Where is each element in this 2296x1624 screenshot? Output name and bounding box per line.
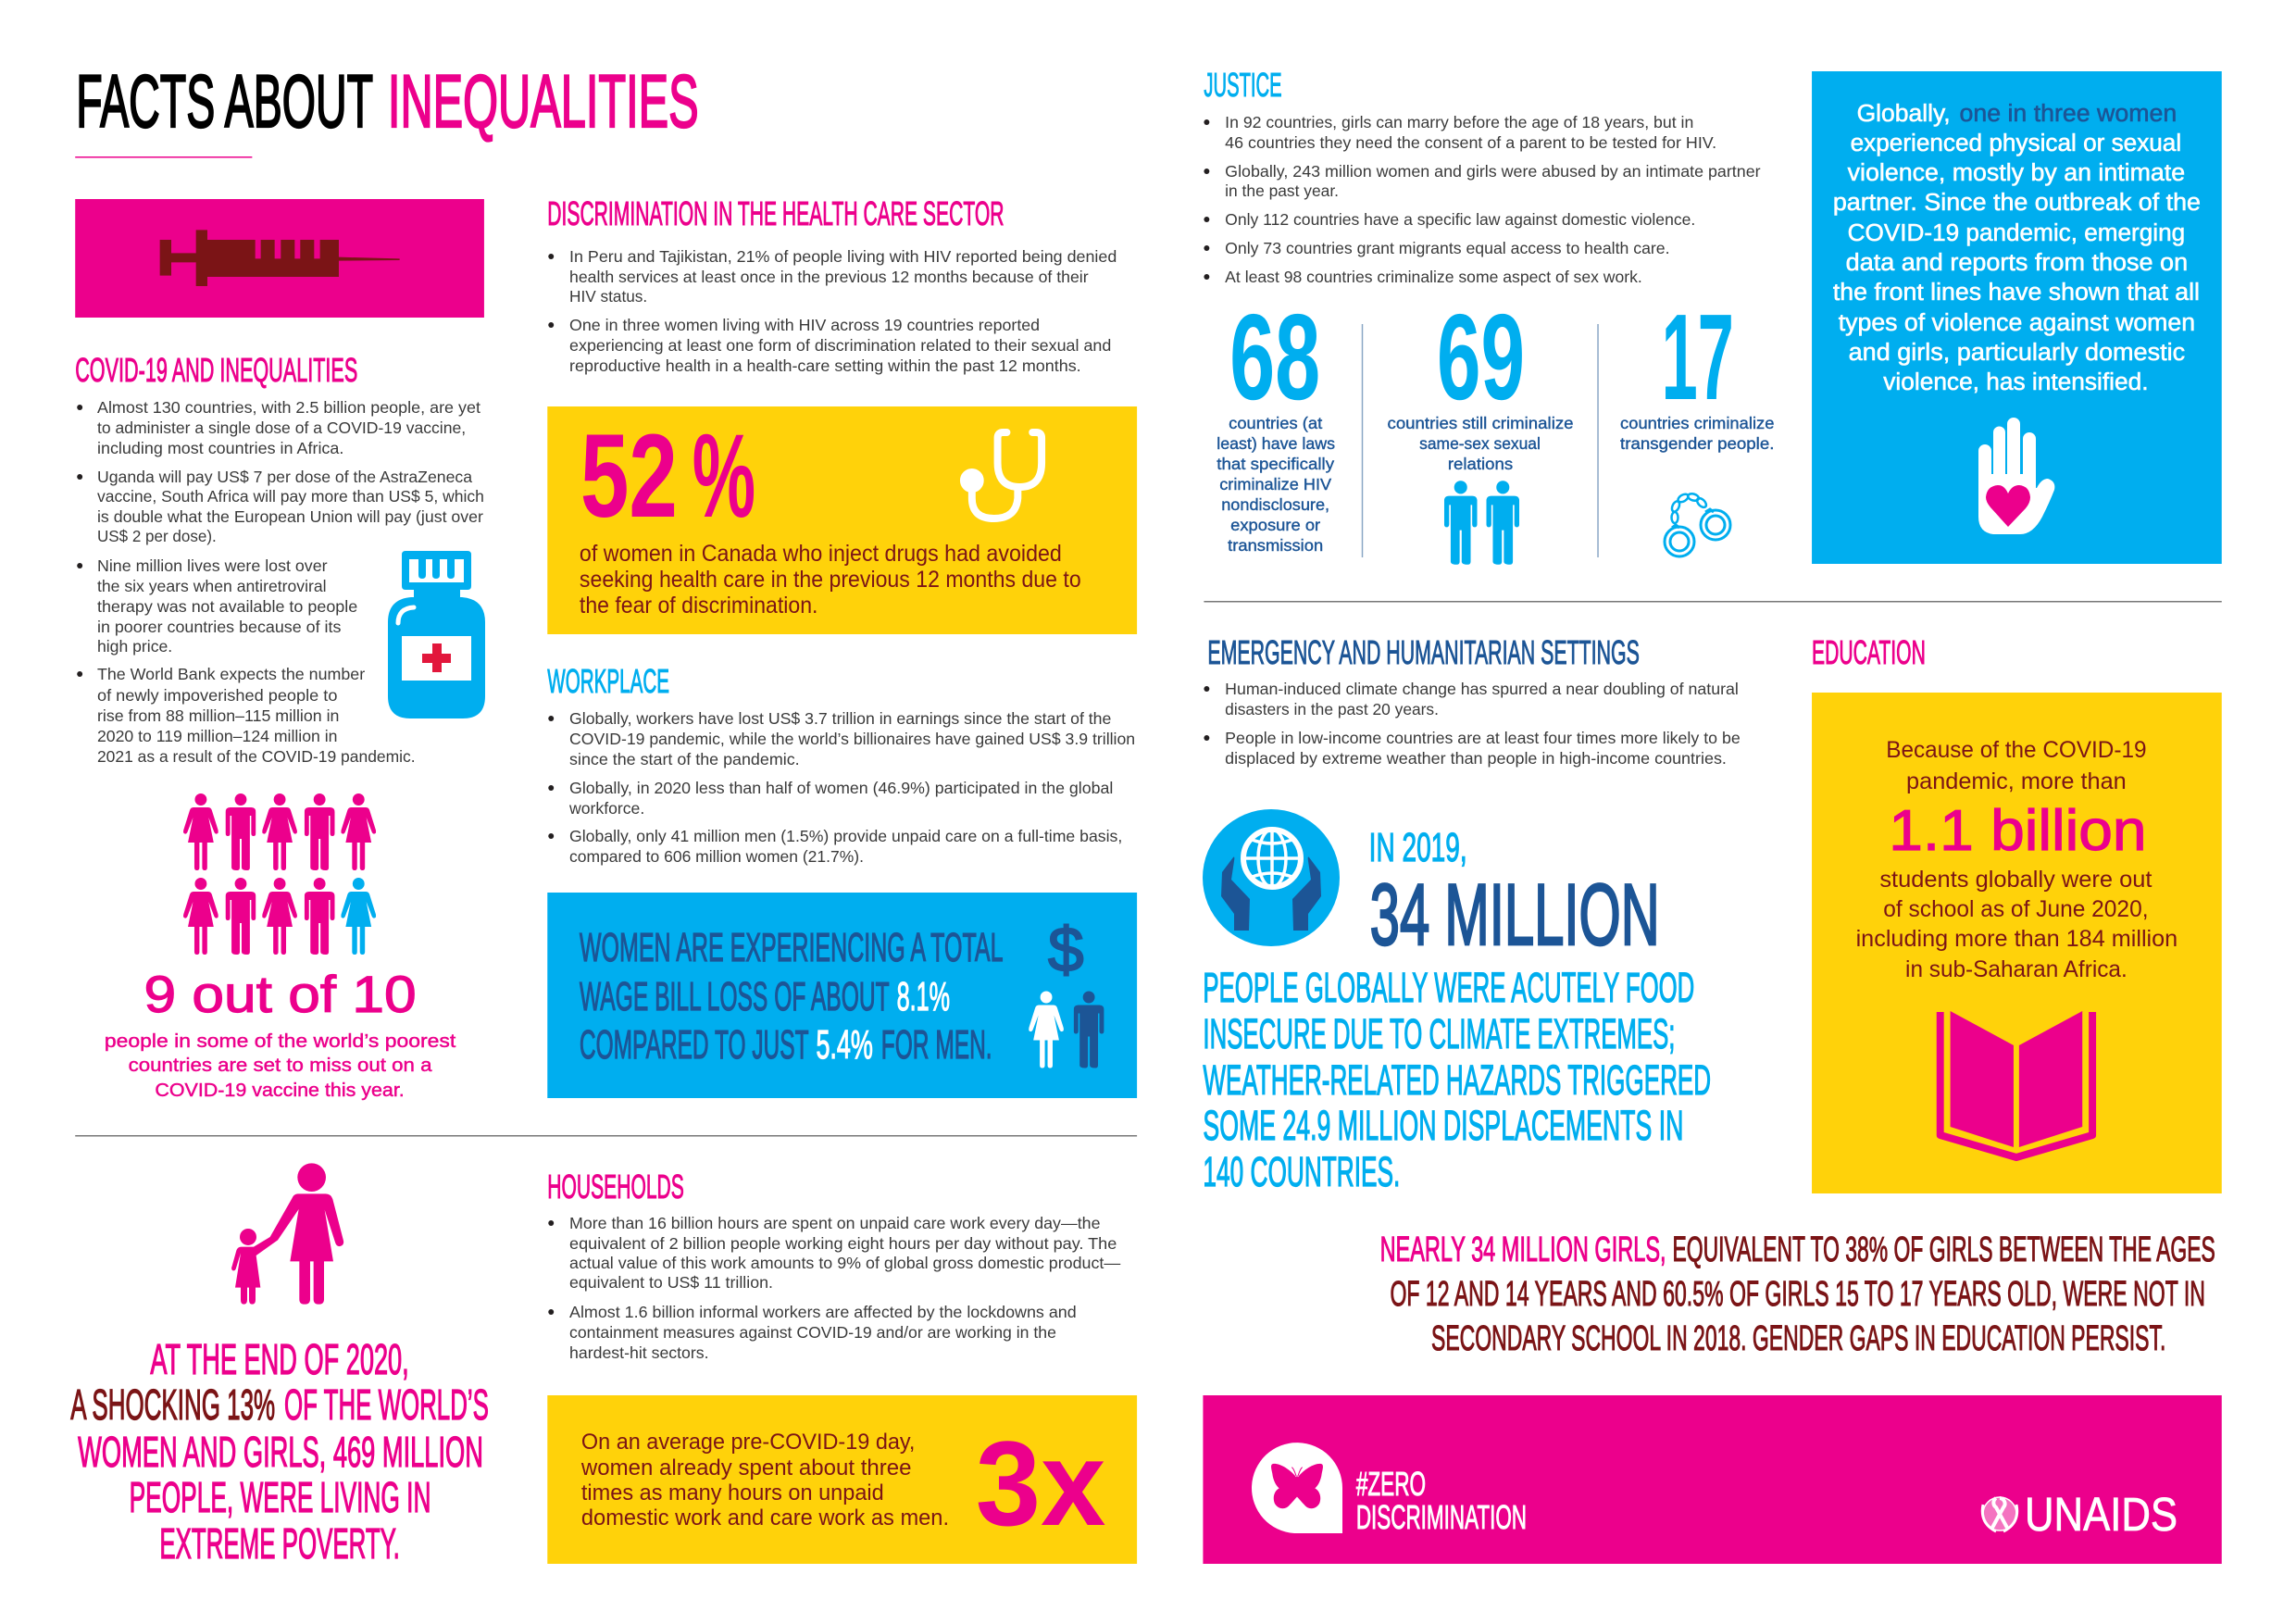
text block: vaccine caption: countries are set to miss out on a bbox=[129, 1056, 433, 1076]
text block: unpaid care: times as many hours on unpaid bbox=[581, 1480, 884, 1505]
text block: one in three women: types of violence against women bbox=[1839, 310, 2195, 336]
text block: covid-19 bullets: Nine million lives were lost over bbox=[97, 556, 328, 575]
heading: workplace: WORKPLACE bbox=[547, 663, 669, 700]
text block: covid-19 bullets: 2020 to 119 million–124 million in bbox=[97, 727, 337, 745]
text block: covid-19 bullets bbox=[77, 398, 484, 766]
text block: in 2019: 34 MILLION bbox=[1370, 866, 1660, 963]
text: hashtag bbox=[1356, 1466, 1527, 1536]
text block: one in three women: the front lines have shown that all bbox=[1833, 280, 2200, 306]
text block: workplace bullets: compared to 606 million women (21.7%). bbox=[569, 847, 864, 866]
text block: workplace bullets bbox=[548, 709, 1135, 866]
text block: emergency bullets: Human-induced climate change has spurred a near doubling of natural bbox=[1225, 680, 1739, 698]
text block: covid-19 bullets: rise from 88 million–115 million in bbox=[97, 706, 339, 725]
stat: 68 countries: nondisclosure, bbox=[1221, 495, 1329, 514]
text block: covid-19 bullets: of newly impoverished people to bbox=[97, 686, 337, 705]
text block: one in three women: violence, mostly by an intimate bbox=[1848, 160, 2185, 186]
stat: 69 countries: 69 bbox=[1437, 288, 1525, 425]
text block: education detail bbox=[1856, 867, 2177, 982]
text block: emergency bullets: displaced by extreme weather than people in high-income countries. bbox=[1225, 749, 1727, 768]
text block: discrimination bullets: One in three women living with HIV across 19 countries reported bbox=[569, 316, 1040, 334]
text block: covid-19 bullets: vaccine, South Africa will pay more than US$ 5, which bbox=[97, 487, 484, 506]
big number: 52%: 52 bbox=[580, 409, 678, 542]
text block: households bullets: Almost 1.6 billion informal workers are affected by the lockdowns and bbox=[569, 1303, 1077, 1321]
text block: one in three women: Globally, bbox=[1857, 101, 1951, 127]
text block: covid-19 bullets: the six years when antiretroviral bbox=[97, 577, 327, 595]
icon: dollar sign: $ bbox=[1048, 916, 1084, 985]
text block: wage bill: 5.4% bbox=[816, 1022, 873, 1068]
text block: extreme poverty: OF THE WORLD’S bbox=[284, 1381, 489, 1429]
text block: food insecurity: WEATHER-RELATED HAZARDS TRIGGERED bbox=[1203, 1057, 1711, 1104]
text block: in 2019: IN 2019, bbox=[1369, 825, 1467, 870]
text block: workplace bullets: workforce. bbox=[568, 799, 644, 818]
text block: vaccine caption: people in some of the world’s poorest bbox=[105, 1031, 456, 1052]
stat: 68 countries: criminalize HIV bbox=[1219, 475, 1331, 493]
panel: syringe banner bbox=[75, 199, 484, 318]
text block: covid-19 bullets: The World Bank expects the number bbox=[97, 665, 365, 683]
text block: covid-19 bullets: therapy was not available to people bbox=[97, 597, 357, 616]
heading: discrimination in health care: DISCRIMINATION IN THE HEALTH CARE SECTOR bbox=[547, 195, 1004, 232]
icon: handcuffs bbox=[1665, 493, 1730, 556]
text block: one in three women: partner. Since the outbreak of the bbox=[1833, 190, 2201, 216]
text block: discrimination bullets: reproductive health in a health-care setting within the past 12 months. bbox=[569, 356, 1081, 375]
text block: justice bullets: In 92 countries, girls can marry before the age of 18 years, but in bbox=[1225, 113, 1693, 131]
panel: wage bill callout bbox=[547, 893, 1137, 1098]
icon: ten people, nine in pink bbox=[183, 793, 376, 955]
stat: 17 countries: countries criminalize bbox=[1620, 414, 1774, 432]
text block: food insecurity: PEOPLE GLOBALLY WERE ACUTELY FOOD bbox=[1203, 965, 1694, 1011]
text block: in 2019 bbox=[1369, 825, 1660, 963]
text block: unpaid care bbox=[580, 1430, 949, 1530]
text block: households bullets: containment measures against COVID-19 and/or are working in the bbox=[569, 1323, 1056, 1342]
text block: discrimination bullets bbox=[548, 247, 1117, 375]
panel: footer banner bbox=[1203, 1395, 2222, 1564]
text block: education intro: Because of the COVID-19 bbox=[1886, 737, 2147, 763]
text block: wage bill: WOMEN ARE EXPERIENCING A TOTAL bbox=[580, 925, 1003, 970]
text block: 52 percent caption bbox=[580, 541, 1081, 618]
icon: syringe bbox=[160, 230, 400, 286]
text block: 52 percent caption: of women in Canada who inject drugs had avoided bbox=[580, 541, 1062, 567]
text block: workplace bullets: Globally, workers have lost US$ 3.7 trillion in earnings since the start of the bbox=[569, 709, 1111, 728]
text block: justice bullets bbox=[1204, 113, 1761, 286]
heading: justice: JUSTICE bbox=[1204, 67, 1282, 104]
stat: 68 countries: least) have laws bbox=[1217, 434, 1335, 453]
text block: education detail: of school as of June 2020, bbox=[1883, 896, 2149, 922]
icon: butterfly speech bubble bbox=[1252, 1443, 1342, 1533]
heading: covid-19 and inequalities: COVID-19 AND INEQUALITIES bbox=[75, 352, 357, 389]
text block: emergency bullets: disasters in the past 20 years. bbox=[1225, 700, 1439, 718]
text block: justice bullets: in the past year. bbox=[1225, 181, 1339, 200]
text block: education intro: pandemic, more than bbox=[1906, 768, 2127, 794]
text block: extreme poverty: WOMEN AND GIRLS, 469 MILLION bbox=[78, 1429, 483, 1476]
stat: 69 countries: relations bbox=[1448, 455, 1513, 473]
text block: girls out of school bbox=[1380, 1230, 2215, 1358]
stat: 68 countries bbox=[1217, 288, 1335, 555]
text block: unpaid care: On an average pre-COVID-19 day, bbox=[581, 1430, 915, 1455]
text block: one in three women: and girls, particularly domestic bbox=[1849, 340, 2185, 366]
text block: justice bullets: 46 countries they need the consent of a parent to be tested for HIV. bbox=[1225, 133, 1716, 152]
big number: 3x: 3x bbox=[976, 1417, 1105, 1551]
text block: covid-19 bullets: to administer a single dose of a COVID-19 vaccine, bbox=[97, 418, 466, 437]
stat: 17 countries bbox=[1620, 288, 1774, 453]
title: FACTS ABOUT bbox=[76, 60, 373, 144]
panel: 52 percent callout bbox=[547, 406, 1137, 634]
stat: 68 countries: that specifically bbox=[1217, 455, 1334, 473]
icon: open book bbox=[1940, 1011, 2092, 1157]
text block: justice bullets: Only 73 countries grant migrants equal access to health care. bbox=[1225, 239, 1670, 257]
text block: one in three women bbox=[1833, 101, 2201, 395]
big number: 9 out of 10: 9 out of 10 bbox=[144, 966, 417, 1023]
text block: food insecurity: 140 COUNTRIES. bbox=[1203, 1149, 1400, 1195]
text block: discrimination bullets: experiencing at least one form of discrimination related to their sexual and bbox=[569, 336, 1111, 355]
text block: one in three women: experienced physical or sexual bbox=[1851, 131, 2181, 156]
stat: 68 countries: 68 bbox=[1229, 288, 1320, 425]
text block: workplace bullets: COVID-19 pandemic, while the world’s billionaires have gained US$ 3.9 trillion bbox=[569, 730, 1135, 748]
text block: households bullets: hardest-hit sectors. bbox=[569, 1343, 709, 1362]
icon: woman and man bbox=[1029, 991, 1104, 1068]
text block: one in three women: COVID-19 pandemic, emerging bbox=[1848, 220, 2185, 246]
stat: 68 countries: transmission bbox=[1228, 536, 1323, 555]
panel: violence against women bbox=[1812, 71, 2222, 564]
text block: households bullets: More than 16 billion hours are spent on unpaid care work every day—the bbox=[569, 1214, 1100, 1232]
stat: 68 countries: exposure or bbox=[1230, 516, 1320, 534]
text block: households bullets: actual value of this work amounts to 9% of global gross domestic product— bbox=[569, 1254, 1121, 1272]
text block: unpaid care: women already spent about three bbox=[580, 1455, 911, 1480]
text block: justice bullets: Globally, 243 million women and girls were abused by an intimate partner bbox=[1225, 162, 1761, 181]
text block: discrimination bullets: HIV status. bbox=[569, 287, 647, 306]
stat: 68 countries: countries (at bbox=[1229, 414, 1322, 432]
icon: two men bbox=[1444, 481, 1519, 565]
text block: households bullets bbox=[548, 1214, 1121, 1362]
text block: extreme poverty bbox=[70, 1336, 489, 1568]
stat: 69 countries: same-sex sexual bbox=[1419, 434, 1541, 453]
big number: 52%: % bbox=[693, 409, 755, 542]
text block: justice bullets: At least 98 countries criminalize some aspect of sex work. bbox=[1225, 268, 1642, 286]
heading: emergency and humanitarian settings: EMERGENCY AND HUMANITARIAN SETTINGS bbox=[1207, 634, 1640, 671]
text: hashtag: DISCRIMINATION bbox=[1356, 1499, 1527, 1536]
icon: medicine bottle bbox=[388, 551, 485, 718]
text block: wage bill: 8.1% bbox=[897, 974, 950, 1019]
icon: mother and child bbox=[231, 1163, 343, 1305]
text block: households bullets: equivalent of 2 billion people working eight hours per day without pay. The bbox=[569, 1234, 1117, 1253]
text block: justice bullets: Only 112 countries have a specific law against domestic violence. bbox=[1225, 210, 1695, 229]
text block: wage bill: WAGE BILL LOSS OF ABOUT bbox=[580, 974, 890, 1019]
logo: UNAIDS bbox=[1982, 1488, 2177, 1541]
text block: education detail: including more than 184 million bbox=[1856, 926, 2177, 952]
text block: vaccine caption: COVID-19 vaccine this year. bbox=[155, 1081, 405, 1101]
logo: UNAIDS: UNAIDS bbox=[2025, 1488, 2177, 1541]
text block: covid-19 bullets: Uganda will pay US$ 7 per dose of the AstraZeneca bbox=[97, 468, 472, 486]
text block: households bullets: equivalent to US$ 11 trillion. bbox=[569, 1273, 773, 1292]
text block: food insecurity bbox=[1203, 965, 1711, 1195]
text block: wage bill: FOR MEN. bbox=[881, 1022, 992, 1068]
text block: one in three women: one in three women bbox=[1960, 101, 2177, 127]
text block: food insecurity: INSECURE DUE TO CLIMATE EXTREMES; bbox=[1203, 1011, 1675, 1057]
text block: covid-19 bullets: Almost 130 countries, with 2.5 billion people, are yet bbox=[97, 398, 480, 417]
text block: discrimination bullets: In Peru and Tajikistan, 21% of people living with HIV reported being denied bbox=[569, 247, 1117, 266]
stat: 69 countries bbox=[1387, 288, 1574, 565]
text block: covid-19 bullets: US$ 2 per dose). bbox=[97, 527, 217, 545]
text block: extreme poverty: AT THE END OF 2020, bbox=[150, 1336, 409, 1383]
text block: extreme poverty: PEOPLE, WERE LIVING IN bbox=[130, 1474, 430, 1521]
text block: one in three women: violence, has intensified. bbox=[1883, 369, 2149, 395]
text block: workplace bullets: since the start of the pandemic. bbox=[569, 750, 800, 768]
icon: hands holding globe bbox=[1203, 809, 1340, 946]
text block: covid-19 bullets: is double what the European Union will pay (just over bbox=[97, 507, 483, 526]
text block: covid-19 bullets: in poorer countries because of its bbox=[97, 618, 342, 636]
text block: workplace bullets: Globally, only 41 million men (1.5%) provide unpaid care on a full-time basis, bbox=[569, 827, 1122, 845]
text block: vaccine caption bbox=[105, 1031, 456, 1101]
text block: education detail: students globally were out bbox=[1879, 867, 2152, 893]
title: INEQUALITIES bbox=[388, 60, 699, 144]
stat: 17 countries: transgender people. bbox=[1620, 434, 1774, 453]
text block: covid-19 bullets: high price. bbox=[97, 637, 172, 656]
stat: 69 countries: countries still criminalize bbox=[1387, 414, 1574, 432]
text block: discrimination bullets: health services at least once in the previous 12 months because of their bbox=[569, 268, 1089, 286]
heading: households: HOUSEHOLDS bbox=[547, 1168, 684, 1206]
text block: covid-19 bullets: 2021 as a result of the COVID-19 pandemic. bbox=[97, 747, 416, 766]
text block: extreme poverty: A SHOCKING 13% bbox=[70, 1381, 275, 1429]
text block: 52 percent caption: seeking health care in the previous 12 months due to bbox=[580, 567, 1081, 593]
text block: education detail: in sub-Saharan Africa. bbox=[1905, 956, 2128, 982]
text block: one in three women: data and reports from those on bbox=[1846, 250, 2188, 276]
text block: workplace bullets: Globally, in 2020 less than half of women (46.9%) participated in the global bbox=[569, 779, 1113, 797]
text block: unpaid care: domestic work and care work as men. bbox=[581, 1505, 949, 1530]
text block: food insecurity: SOME 24.9 MILLION DISPLACEMENTS IN bbox=[1203, 1103, 1683, 1149]
text block: emergency bullets: People in low-income countries are at least four times more likely to be bbox=[1225, 729, 1741, 747]
text block: 52 percent caption: the fear of discrimination. bbox=[580, 593, 817, 618]
stat: 17 countries: 17 bbox=[1662, 288, 1734, 425]
panel: 3x callout bbox=[547, 1395, 1137, 1564]
icon: raised hand with heart bbox=[1978, 418, 2054, 534]
text block: wage bill: COMPARED TO JUST bbox=[580, 1022, 809, 1068]
text block: education intro bbox=[1886, 737, 2147, 794]
text block: wage bill bbox=[580, 925, 1003, 1068]
text block: girls out of school: NEARLY 34 MILLION GIRLS, bbox=[1380, 1230, 1666, 1269]
text: hashtag: #ZERO bbox=[1356, 1466, 1426, 1503]
text block: extreme poverty: EXTREME POVERTY. bbox=[159, 1520, 400, 1568]
text block: emergency bullets bbox=[1204, 680, 1741, 768]
heading: education: EDUCATION bbox=[1812, 634, 1926, 671]
big number: 1.1 billion: 1.1 billion bbox=[1889, 799, 2147, 863]
text block: covid-19 bullets: including most countries in Africa. bbox=[97, 439, 343, 457]
panel: education callout bbox=[1812, 693, 2222, 1193]
icon: stethoscope bbox=[964, 432, 1042, 518]
